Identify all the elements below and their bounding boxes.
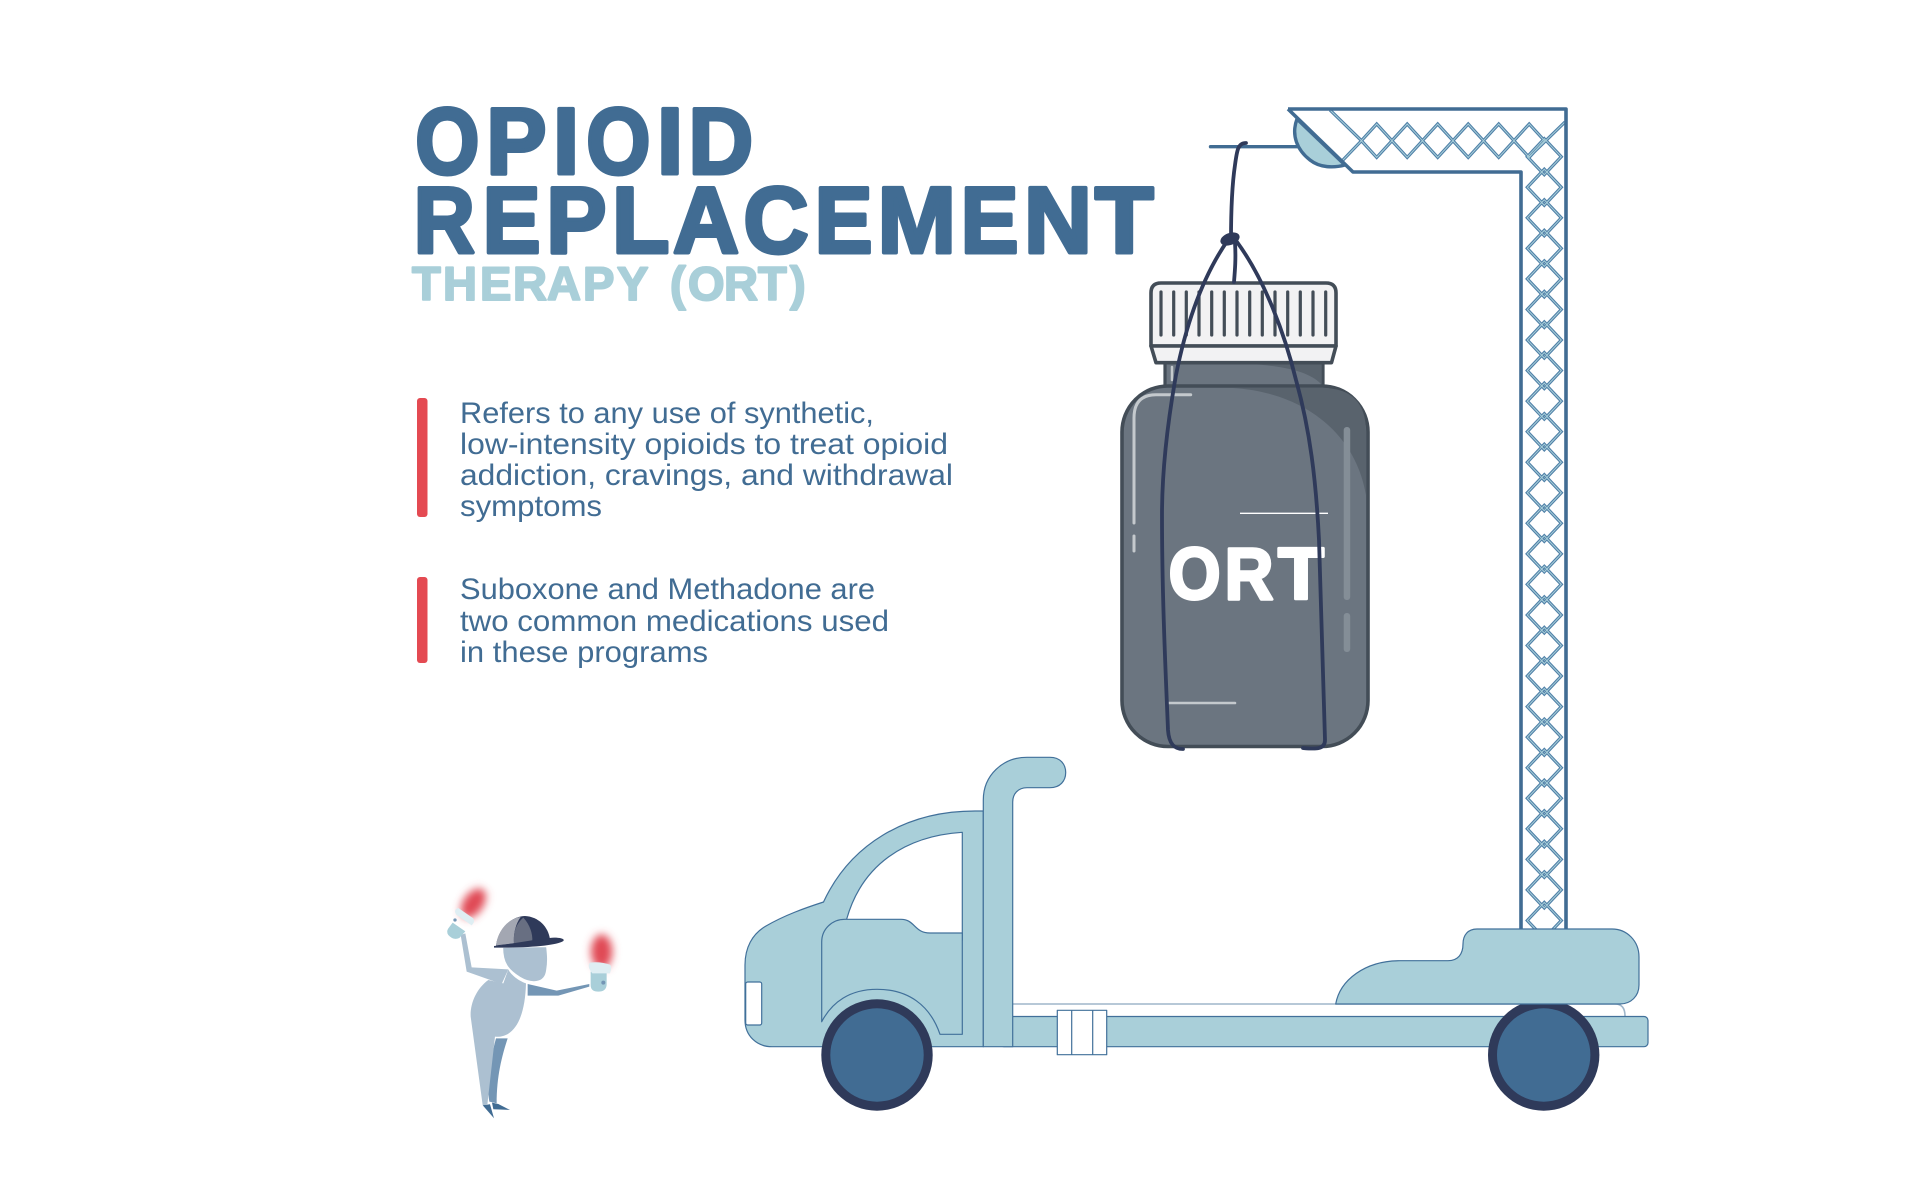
rear body [1336,929,1639,1004]
crane lattice [1330,110,1565,938]
medications text: two common medications used [460,605,889,638]
upper chassis rail [1013,1004,1625,1016]
title line: REPLACEMENT: R [414,168,475,272]
title line: REPLACEMENT: E [815,168,872,272]
red marker bar [417,577,428,663]
left arm [461,933,508,984]
text block: medications [417,573,889,669]
left signal light [447,908,474,939]
bottle body [1122,386,1368,746]
bottle label: ORT: R [1224,534,1274,615]
hook bar [1210,145,1297,148]
cab [745,811,983,1047]
pill bottle [1122,283,1368,746]
right signal light [589,962,611,992]
torso [471,969,526,1105]
subtitle: THERAPY (ORT): THERAPY (ORT) [412,257,806,310]
title line: REPLACEMENT: C [744,168,808,272]
title line: REPLACEMENT [414,168,1154,272]
connector box [1057,1010,1107,1055]
light dot [601,981,605,985]
title line: OPIOID: D [688,88,753,194]
neck highlight [1171,367,1173,380]
bottle label: ORT [1169,534,1324,615]
light head [455,908,474,925]
light handle [447,923,465,939]
chassis bar [1000,1016,1648,1047]
figure holding signal lights [447,884,612,1118]
title line: REPLACEMENT: A [673,168,739,272]
truck [745,757,1648,1111]
feet [483,1103,510,1118]
title [412,88,1154,310]
definition text: addiction, cravings, and withdrawal [460,459,953,492]
light dot [453,918,457,922]
title line: REPLACEMENT: L [612,168,669,272]
light head [589,962,611,973]
rope knot [1219,230,1241,248]
title line: OPIOID: I [657,88,683,194]
bottle highlights [1134,395,1328,703]
crane frame [1288,109,1566,929]
crane arm [1210,109,1566,938]
title line: REPLACEMENT: P [546,168,606,272]
title line: REPLACEMENT: E [961,168,1018,272]
neck shading [1250,364,1321,384]
bottle side reflections [1344,427,1350,652]
definition text: Refers to any use of synthetic, [460,397,874,430]
rear wheel [1488,999,1599,1111]
text block: definition [417,397,953,523]
hard hat [494,916,564,948]
exhaust stack [983,757,1066,1047]
bottle label: ORT: O [1169,534,1221,615]
title line: OPIOID: O [415,88,479,194]
pulley half dome [1295,119,1345,167]
body shading [1233,388,1366,495]
hat dome [496,916,550,946]
bottle label: ORT: T [1278,534,1324,615]
cap ridges [1161,292,1326,335]
medications text: in these programs [460,636,708,669]
title line: OPIOID: I [553,88,579,194]
right red glow [591,934,612,969]
medications text: Suboxone and Methadone are [460,573,875,606]
cap top [1151,283,1336,346]
head [503,947,548,982]
right arm [528,984,589,996]
title line: REPLACEMENT: M [878,168,956,272]
hat brim [494,938,564,948]
door [822,919,962,1034]
bottle cap [1151,283,1336,363]
hat grey panel [496,917,521,945]
red marker bar [417,398,428,517]
front wheel [821,999,933,1111]
title line: OPIOID [415,88,753,194]
title line: OPIOID: P [486,88,546,194]
title line: REPLACEMENT: E [483,168,540,272]
title line: REPLACEMENT: T [1095,168,1154,272]
definition text [460,397,953,523]
bumper light [746,982,762,1025]
hanging rope [1162,143,1325,749]
hat mid panel [514,918,532,943]
definition text: symptoms [460,490,602,523]
window [847,832,962,940]
definition text: low-intensity opioids to treat opioid [460,428,948,461]
title line: REPLACEMENT: N [1024,168,1092,272]
title line: OPIOID: O [586,88,650,194]
light handle [591,972,607,992]
bottle neck [1165,362,1323,388]
left red glow [456,884,491,923]
cap band [1151,346,1336,363]
back leg [488,1038,508,1103]
medications text [460,573,889,669]
